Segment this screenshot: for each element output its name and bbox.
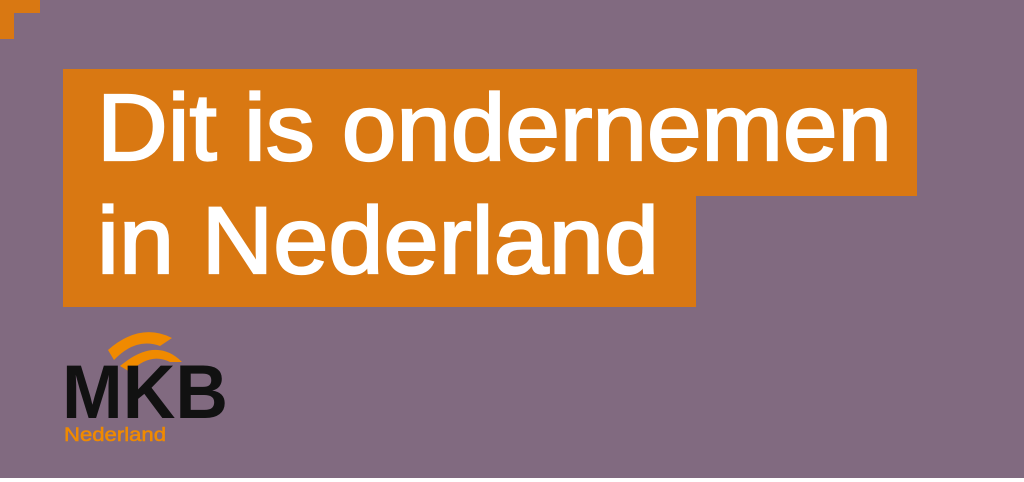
title block xyxy=(63,69,917,307)
corner accent xyxy=(0,0,40,39)
logo: MKB Nederland: Nederland xyxy=(64,425,166,446)
logo: MKB Nederland: MKB xyxy=(62,350,228,435)
icon: orange arcs xyxy=(108,332,182,372)
title text xyxy=(97,75,892,294)
title text: in Nederland xyxy=(97,188,659,294)
title text: Dit is ondernemen xyxy=(97,75,892,181)
